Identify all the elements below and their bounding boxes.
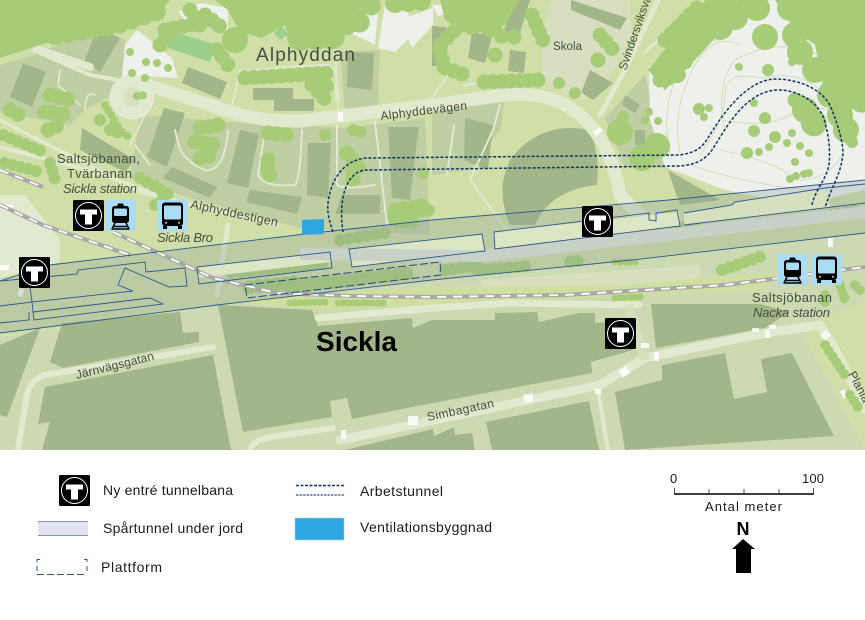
place labels: Sickla (316, 326, 397, 357)
icon: metro entrance centre (582, 206, 613, 237)
map (0, 0, 865, 450)
legend: track tunnel (38, 520, 243, 536)
place labels: Simbagatan (426, 396, 495, 424)
place labels (57, 0, 865, 434)
legend: metro entrance: Ny entré tunnelbana (103, 482, 233, 498)
icon: bus Nacka station (811, 254, 842, 285)
scale bar (670, 471, 824, 514)
icon: train Nacka station (777, 254, 808, 285)
north arrow (732, 519, 755, 573)
crossings (0, 112, 848, 439)
motorway (300, 212, 865, 256)
buildings (0, 0, 834, 450)
platform dashed (245, 262, 441, 298)
place labels: Saltsjöbanan, (57, 151, 140, 166)
legend: platform (37, 559, 162, 575)
trees (0, 0, 865, 410)
work tunnel: lower (342, 90, 830, 232)
legend (37, 475, 492, 575)
scale bar: 100 (802, 471, 824, 486)
place labels: Nacka station (753, 305, 830, 320)
icon: tram Sickla station (105, 200, 136, 231)
place labels: Alphyddevägen (380, 98, 468, 123)
legend: metro entrance (59, 475, 233, 506)
tunnel corridor (0, 180, 865, 333)
roads (0, 0, 865, 450)
scale bar: 0 (670, 471, 677, 486)
icon: metro entrance far west (19, 257, 50, 288)
scale bar: Antal meter (705, 499, 783, 514)
place labels: Saltsjöbanan (752, 290, 832, 305)
legend: track tunnel: Spårtunnel under jord (103, 520, 243, 536)
work tunnel: upper (328, 79, 843, 232)
place labels: Tvärbanan (67, 166, 132, 181)
place labels: Alphyddestigen (189, 197, 279, 229)
legend: ventilation building (295, 518, 492, 540)
legend: ventilation building: Ventilationsbyggnad (360, 519, 492, 535)
place labels: Järnvägsgatan (74, 349, 155, 382)
place labels: Alphyddan (256, 45, 355, 66)
place labels: Sickla station (63, 181, 137, 196)
legend: platform: Plattform (101, 559, 162, 575)
icon: bus Sickla Bro (157, 200, 188, 231)
place labels: Skola (553, 41, 583, 53)
residential blocks and rock (0, 0, 865, 450)
ground (0, 0, 865, 450)
railway: Saltsjöbanan (0, 170, 865, 297)
industrial streets (628, 305, 645, 360)
north arrow: N (736, 519, 750, 539)
icon: metro entrance west (73, 200, 104, 231)
ventilation building (302, 219, 324, 235)
place labels: Sickla Bro (157, 230, 213, 245)
contour lines (667, 40, 850, 190)
tunnel outlines (0, 180, 865, 333)
station platforms zones (197, 190, 830, 278)
icon: metro entrance Simbagatan (605, 318, 636, 349)
legend: work tunnel: Arbetstunnel (360, 483, 443, 499)
